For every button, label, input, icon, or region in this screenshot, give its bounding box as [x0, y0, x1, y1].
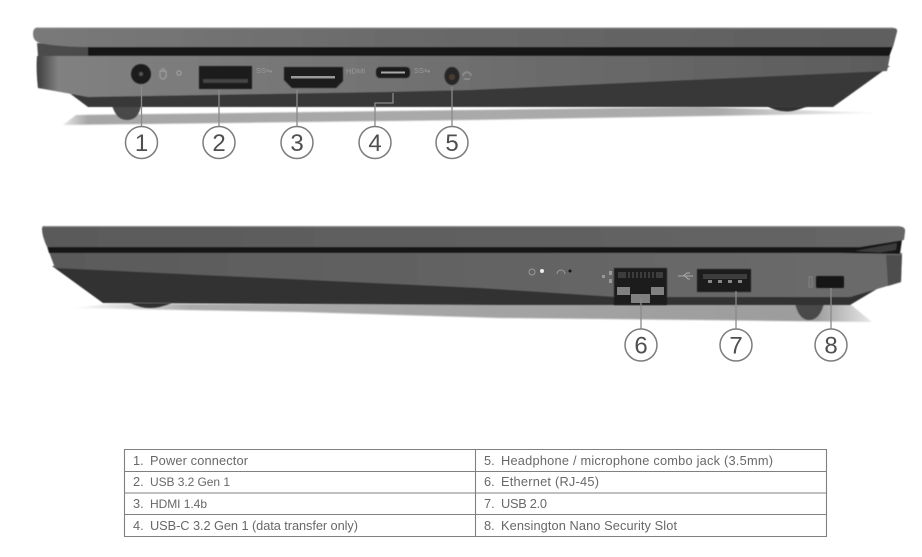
row 1 right: 5.	[484, 453, 495, 468]
laptop bottom view: right side ports	[42, 226, 905, 361]
callout 1	[126, 126, 158, 158]
port: ethernet	[602, 268, 667, 305]
leader lines 1-5	[142, 86, 452, 127]
base panel	[37, 56, 890, 97]
row 3 left: 3.	[133, 496, 144, 511]
foot right	[767, 106, 808, 112]
callout 8	[815, 329, 847, 361]
row 1 left: 1.	[133, 453, 144, 468]
label SS: SS⇋	[256, 66, 273, 75]
base right edge shading	[886, 255, 902, 286]
callout 2	[203, 126, 235, 158]
shadow under laptop 1	[63, 107, 885, 125]
row 4 left: USB-C 3.2 Gen 1 (data transfer only)	[150, 518, 358, 533]
row 1 right: Headphone / microphone combo jack (3.5mm)	[501, 453, 773, 468]
row 2 left: 2.	[133, 474, 144, 489]
callout 8: 8	[824, 332, 838, 360]
leader lines 6-8	[641, 288, 831, 329]
ethernet icon	[602, 271, 612, 283]
lock icon	[809, 277, 812, 287]
lid	[42, 226, 905, 247]
foot left	[130, 303, 172, 308]
callout 1: 1	[135, 130, 148, 157]
row 2 right: Ethernet (RJ-45)	[501, 474, 599, 489]
row 4 right: 8.	[484, 518, 495, 533]
port: Kensington slot	[809, 276, 844, 288]
foot left	[112, 105, 141, 120]
callout 7	[720, 329, 752, 361]
lid	[33, 28, 897, 47]
shadow under laptop 2	[70, 304, 872, 322]
band right highlight	[855, 243, 897, 252]
dark band	[47, 240, 902, 254]
legend table	[124, 450, 826, 536]
row 2 left: USB 3.2 Gen 1	[150, 475, 230, 489]
row 4 right: Kensington Nano Security Slot	[501, 518, 677, 533]
band left section	[37, 43, 88, 56]
row 4 left: 4.	[133, 518, 144, 533]
laptop body 1	[33, 28, 897, 107]
row 3 right: USB 2.0	[501, 496, 547, 511]
callout 3	[281, 126, 313, 158]
callout 5: 5	[445, 130, 459, 157]
row 2 right: 6.	[484, 474, 495, 489]
usb icon	[678, 273, 693, 279]
callout 5	[436, 126, 468, 158]
callout 6: 6	[634, 332, 648, 360]
status icons	[529, 269, 572, 275]
callout 2: 2	[212, 130, 226, 157]
row 3 left: HDMI 1.4b	[150, 497, 207, 511]
power icon	[160, 68, 166, 79]
foot right	[795, 303, 824, 320]
laptop body 2	[42, 226, 905, 305]
label SS: SS⇋	[414, 66, 431, 75]
laptop top view: left side ports	[33, 28, 897, 158]
lower dark wedge	[52, 266, 892, 305]
callout 3: 3	[290, 130, 304, 157]
dark band	[85, 46, 893, 57]
port: power connector	[131, 64, 166, 84]
port: USB-C	[376, 66, 431, 78]
port: USB 2.0	[678, 269, 751, 292]
port: USB 3.2	[199, 66, 273, 89]
callout 6	[625, 329, 657, 361]
row 1 left: Power connector	[150, 453, 249, 468]
base panel	[49, 252, 902, 297]
led	[177, 71, 181, 75]
table grid	[124, 450, 826, 536]
port: HDMI	[284, 66, 365, 88]
base left edge shading	[37, 56, 58, 91]
headset icon	[463, 72, 471, 79]
lower dark wedge	[68, 66, 890, 107]
callout 7: 7	[729, 332, 743, 360]
callout 4: 4	[368, 130, 382, 157]
row 3 right: 7.	[484, 496, 495, 511]
label HDMI: HDMI	[346, 66, 365, 76]
callout 4	[359, 126, 391, 158]
port: audio jack	[444, 67, 471, 85]
